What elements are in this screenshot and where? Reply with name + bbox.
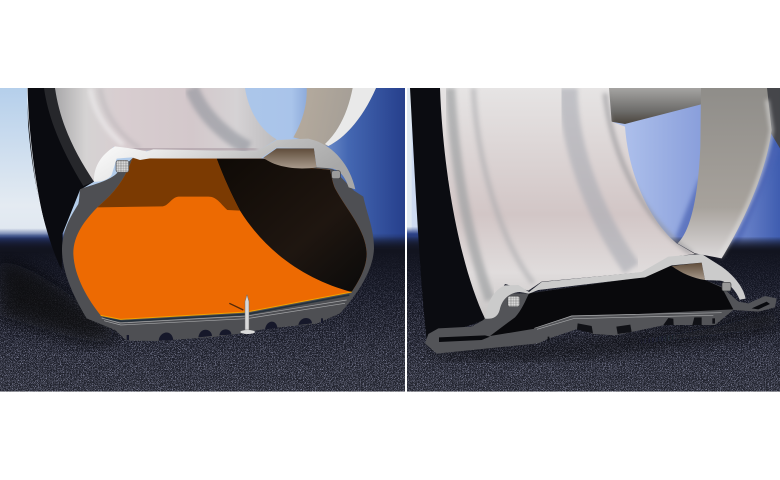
rim section profile	[94, 139, 355, 189]
background: sky and road	[405, 88, 780, 392]
belt plies	[102, 300, 347, 325]
tyre cavity: orange interior	[73, 159, 367, 319]
wheel spoke	[678, 88, 772, 258]
cavity: shadowed orange upper area	[97, 159, 240, 211]
brown inner rim face	[263, 148, 317, 168]
infographic: two tyre cross-sections	[0, 88, 780, 392]
icon: spoke of the wheel	[293, 88, 376, 146]
panel: flat tyre	[405, 88, 780, 392]
nail through tread	[229, 295, 255, 334]
flat tyre fold slit	[439, 335, 490, 342]
tread grooves	[548, 317, 715, 341]
wheel hub	[607, 88, 705, 124]
bead wire left	[116, 160, 129, 172]
cavity: black inner wall	[217, 159, 367, 292]
brown inner rim face	[672, 263, 705, 280]
far right spoke shadow	[767, 88, 780, 148]
panel: inflated tyre with nail puncture	[0, 88, 405, 392]
inner liner edge	[101, 292, 352, 319]
tyre section: flattened rubber casing	[425, 265, 777, 354]
tread grooves	[127, 318, 323, 341]
wheel rim barrel	[440, 88, 695, 319]
tyre section: rubber casing	[62, 157, 374, 341]
tyre sidewall	[410, 88, 485, 340]
tyre sidewall behind the section	[27, 88, 94, 270]
bead wire left	[508, 296, 520, 307]
rim section profile	[485, 254, 746, 319]
tyre cavity: black interior	[490, 265, 733, 336]
wheel rim barrel	[55, 88, 277, 182]
bead wire right	[332, 171, 340, 179]
belt plies	[534, 313, 722, 329]
background: sky and road	[0, 88, 405, 392]
bead wire right	[722, 282, 731, 291]
